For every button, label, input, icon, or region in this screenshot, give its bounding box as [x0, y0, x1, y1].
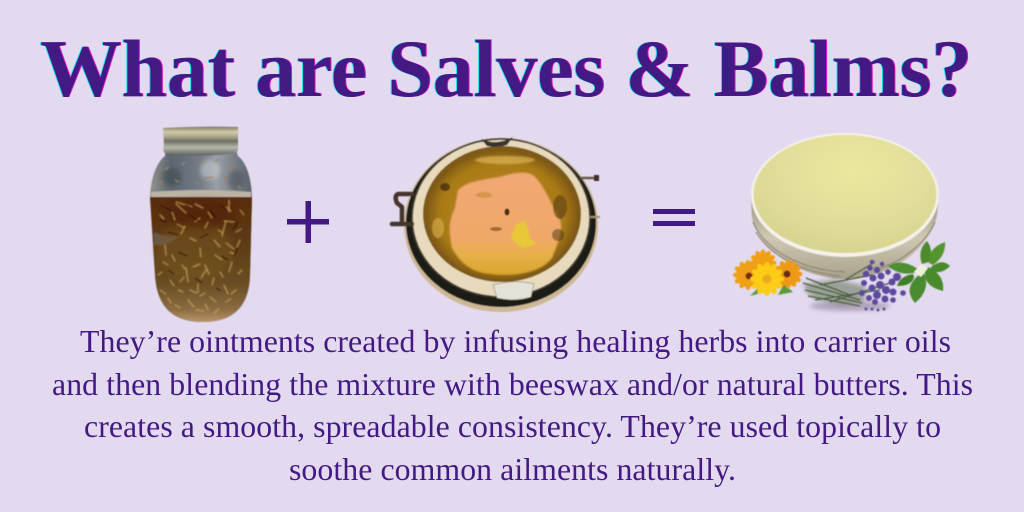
yellow beeswax fragment [511, 220, 536, 248]
bottom spout [493, 282, 534, 300]
icon: jar of herbs infusing in oil [150, 127, 252, 322]
icon: plus sign [287, 201, 329, 243]
lavender sprigs [803, 260, 906, 312]
icon: equals sign [653, 209, 695, 226]
title: What are Salves & Balms? [39, 23, 971, 114]
body text: creates a smooth, spreadable consistency. They’re used topically to [84, 409, 941, 444]
oil surface [423, 146, 581, 282]
title: What are Salves & Balms? [40, 23, 972, 114]
left handle [392, 194, 412, 224]
oil with herbs [150, 197, 252, 322]
body text: They’re ointments created by infusing healing herbs into carrier oils [80, 324, 951, 359]
top spout [481, 137, 513, 147]
tin rim [751, 133, 939, 257]
beeswax blob [450, 173, 561, 275]
herb strands [158, 200, 244, 313]
icon: double boiler pot with melting beeswax and oil [392, 137, 600, 312]
tin side [751, 195, 939, 279]
icon: salve tin with calendula, lavender and herb leaves [733, 133, 950, 312]
body text: soothe common ailments naturally. [289, 452, 736, 487]
glass highlights and debris [162, 168, 182, 186]
calendula flowers [733, 249, 802, 296]
outer base ring [404, 138, 598, 312]
right pins [580, 177, 596, 179]
body text [52, 324, 973, 487]
body text: and then blending the mixture with beeswax and/or natural butters. This [52, 367, 973, 402]
title: What are Salves & Balms? [41, 23, 973, 114]
jar lid [163, 127, 238, 156]
pot rim [412, 139, 590, 297]
top glare [475, 156, 535, 164]
herb leaves [888, 241, 950, 303]
jar glass [150, 150, 252, 322]
salve surface [754, 135, 936, 253]
